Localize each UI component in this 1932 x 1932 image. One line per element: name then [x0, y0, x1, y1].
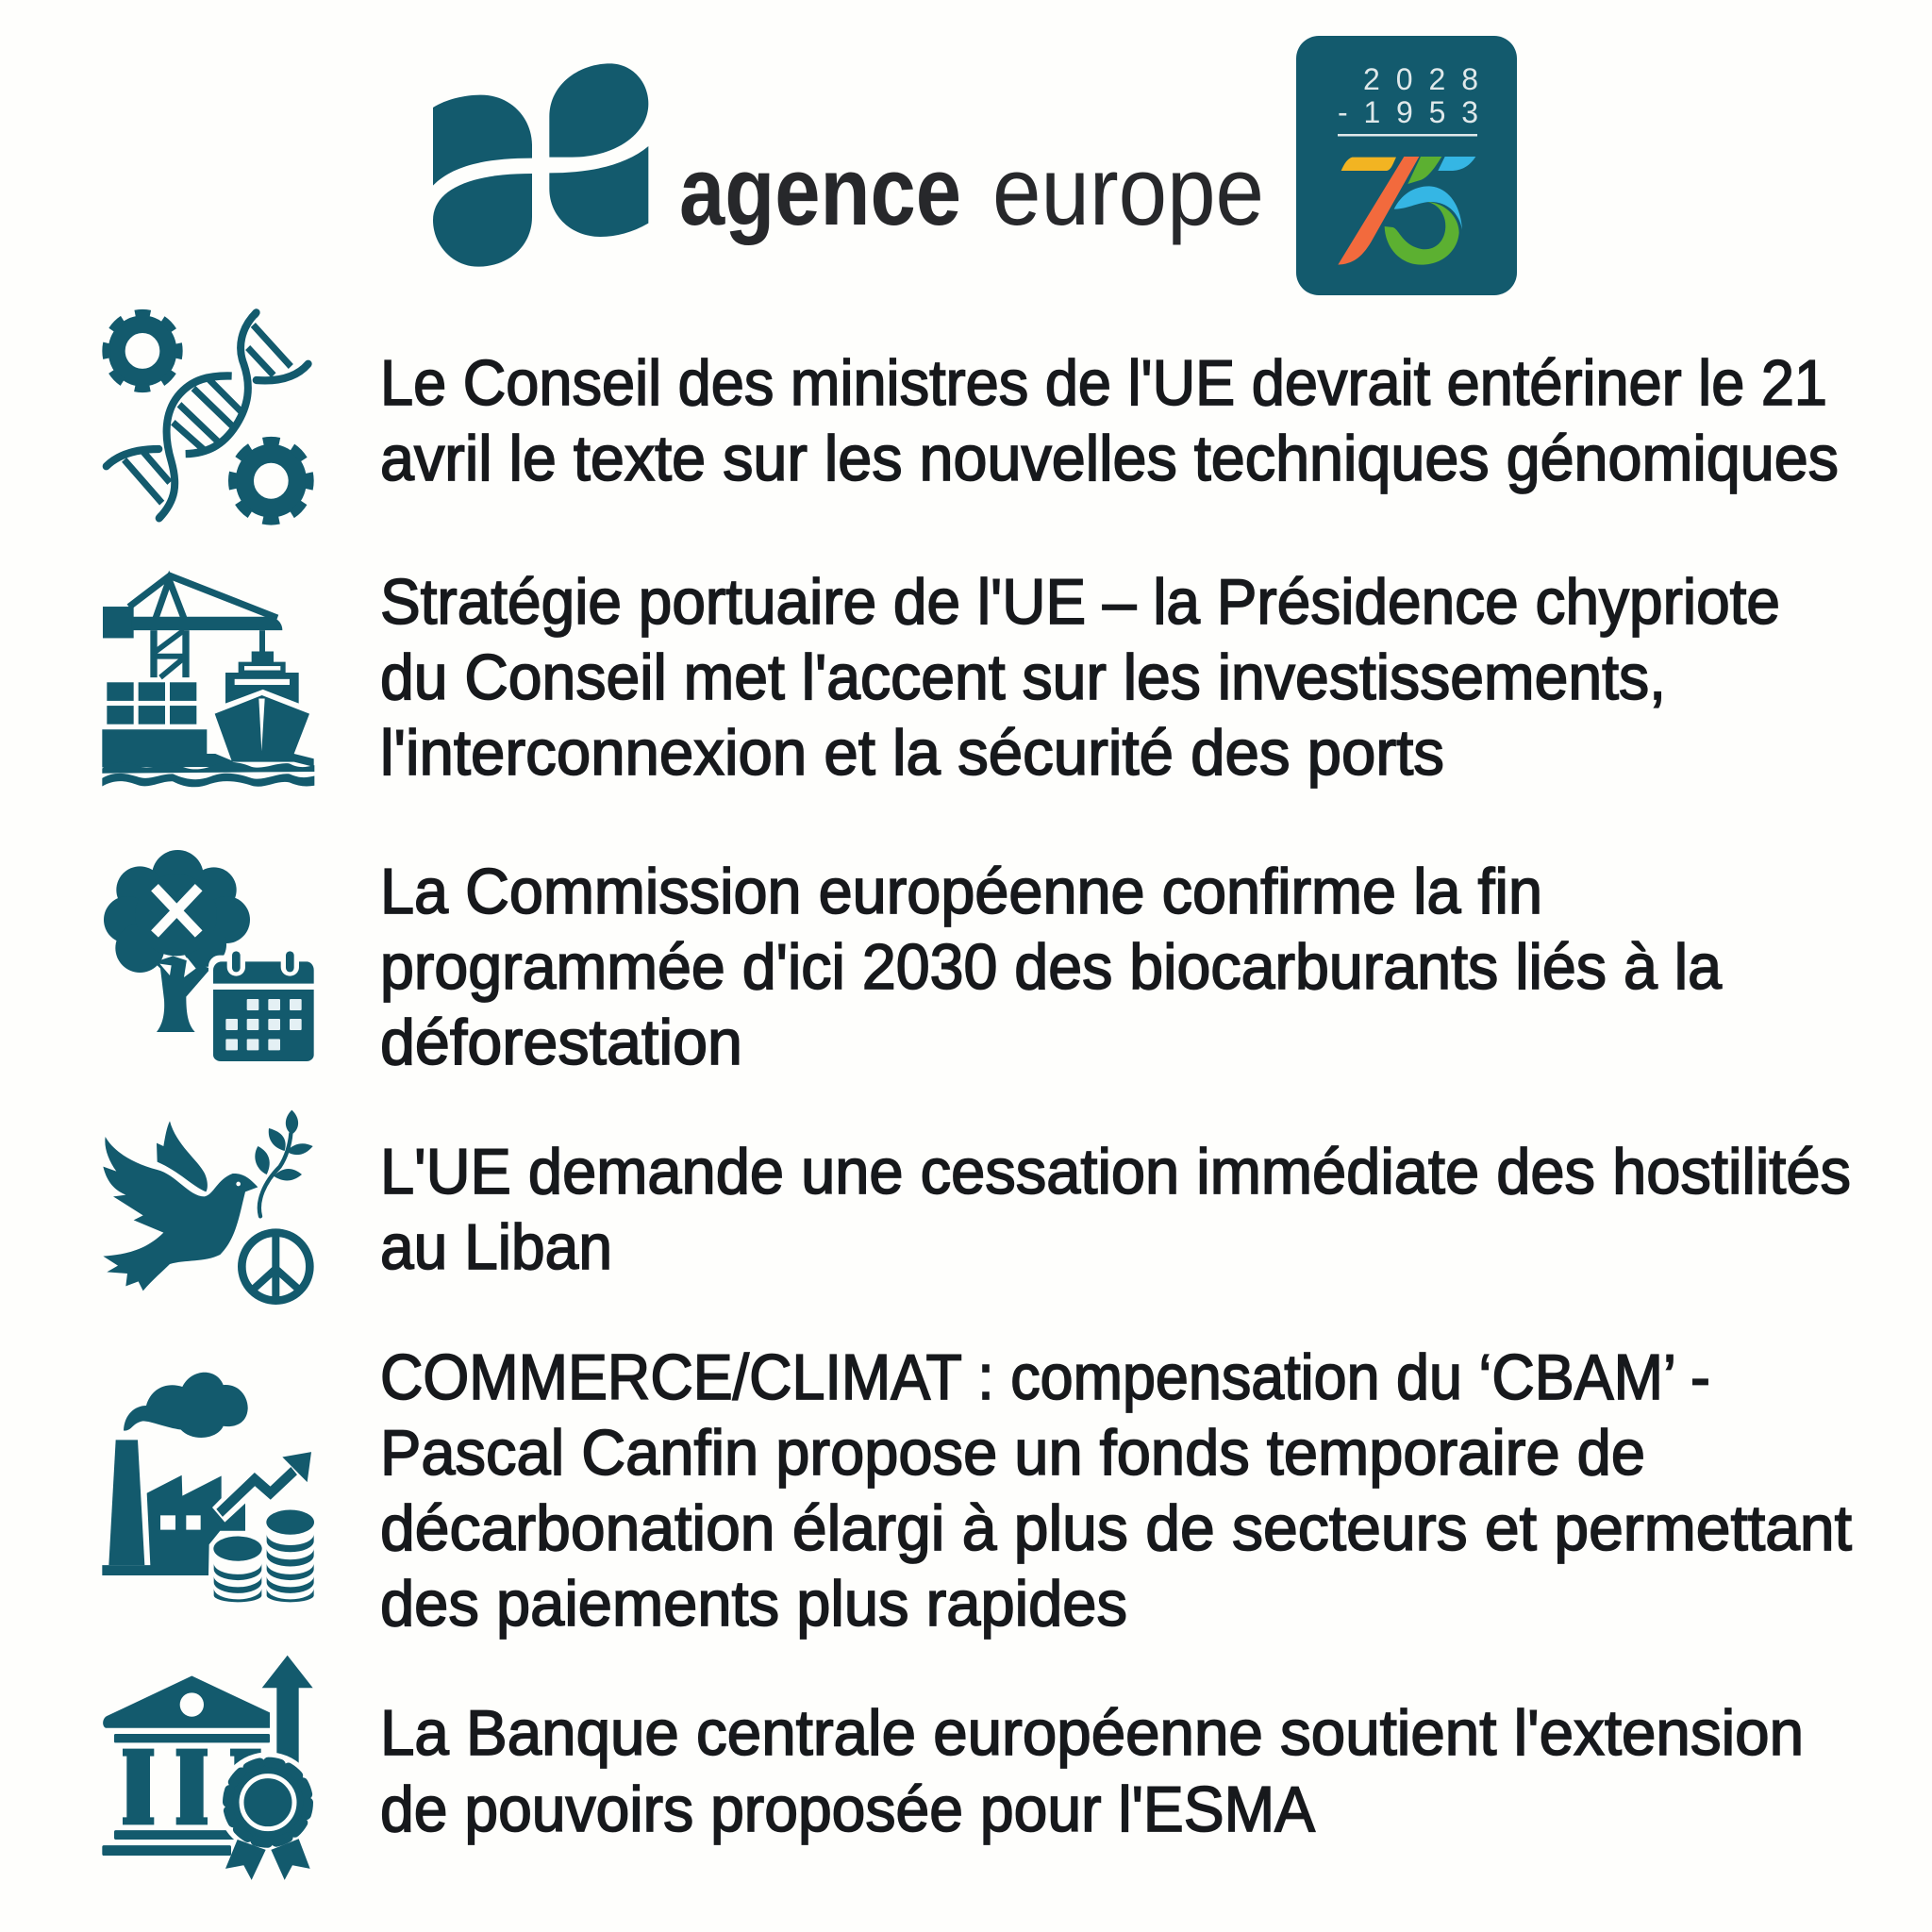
icon: port crane, containers and ship	[102, 575, 314, 787]
icon: bank with up arrow and seal	[102, 1656, 318, 1880]
coins	[213, 1510, 314, 1602]
text: Lebanon ceasefire: au Liban	[380, 1211, 612, 1283]
text: port strategy	[380, 566, 1780, 789]
text: biofuels	[380, 856, 1722, 1078]
text: Lebanon ceasefire	[380, 1136, 1851, 1283]
text: CBAM compensation	[380, 1341, 1852, 1640]
logo wordmark	[679, 137, 1264, 245]
badge years: -1953	[1338, 95, 1478, 129]
icon: tree with cross and calendar	[104, 850, 317, 1065]
text: ESMA powers	[380, 1697, 1804, 1845]
text: CBAM compensation: Pascal Canfin propose un fonds temporaire de	[380, 1417, 1645, 1489]
icon: dove with olive branch and peace sign	[103, 1110, 313, 1301]
text: port strategy: Stratégie portuaire de l'UE – la Présidence chypriote	[380, 566, 1780, 638]
header: logo and anniversary badge	[433, 36, 1517, 295]
text: CBAM compensation: des paiements plus rapides	[380, 1568, 1127, 1640]
text: CBAM compensation: COMMERCE/CLIMAT : compensation du ‘CBAM’ -	[380, 1341, 1710, 1413]
text: Lebanon ceasefire: L'UE demande une cessation immédiate des hostilités	[380, 1136, 1851, 1208]
text: biofuels: déforestation	[380, 1007, 742, 1078]
text: ESMA powers: La Banque centrale européenne soutient l'extension	[380, 1697, 1804, 1769]
logo wordmark: europe	[992, 137, 1264, 245]
seal	[218, 1752, 318, 1880]
text: genomic techniques: Le Conseil des ministres de l'UE devrait entériner le 21	[380, 347, 1827, 419]
text: genomic techniques: avril le texte sur les nouvelles techniques génomiques	[380, 423, 1839, 494]
text: biofuels: programmée d'ici 2030 des biocarburants liés à la	[380, 931, 1722, 1003]
badge years: 2028	[1363, 62, 1478, 96]
anniversary badge	[1296, 36, 1517, 295]
text: port strategy: l'interconnexion et la sécurité des ports	[380, 717, 1444, 789]
icon: agence europe logo mark	[433, 63, 648, 267]
text: genomic techniques	[380, 347, 1839, 494]
text: biofuels: La Commission européenne confirme la fin	[380, 856, 1542, 927]
text: port strategy: du Conseil met l'accent sur les investissements,	[380, 641, 1666, 713]
logo wordmark: agence	[679, 137, 961, 245]
text: ESMA powers: de pouvoirs proposée pour l'ESMA	[380, 1774, 1316, 1845]
badge number 75	[1338, 157, 1475, 265]
icon: factory, rising arrow and coins	[102, 1373, 314, 1602]
text: CBAM compensation: décarbonation élargi à plus de secteurs et permettant	[380, 1492, 1852, 1564]
badge years	[1338, 62, 1478, 136]
icon: DNA and gears	[107, 312, 309, 521]
